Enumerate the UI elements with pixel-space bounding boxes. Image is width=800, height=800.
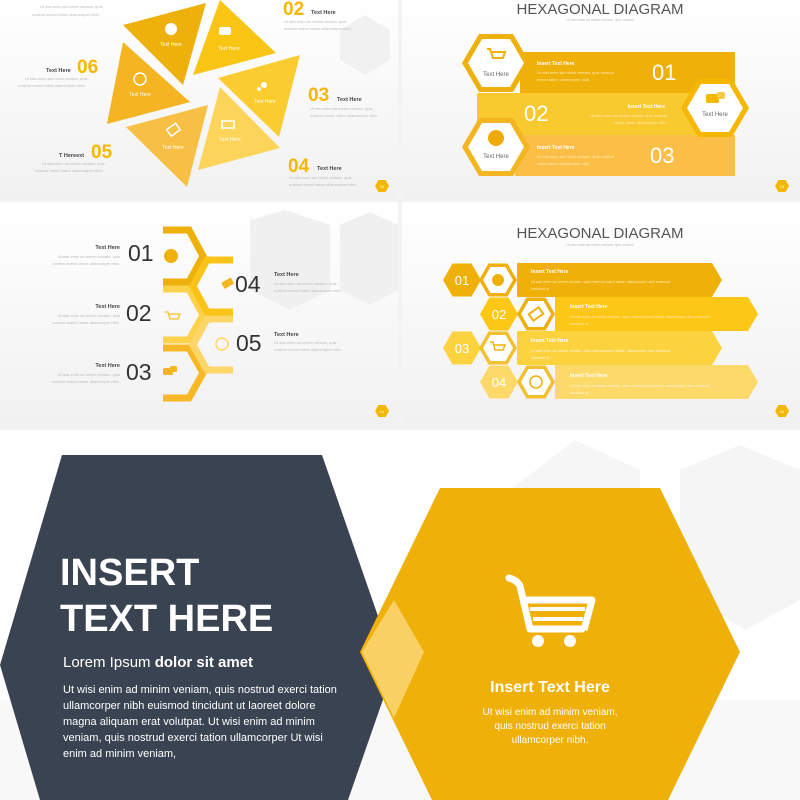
row 4: Ut wisi enim ad minim veniam, quis nostrud exerci tation ullamcorper nibh euismod [570, 384, 709, 388]
triangle 3 share [218, 55, 300, 137]
panel: slide 15 hexagonal diagram rows: Ut wisi enim ad minim veniam, quis nostrud [566, 243, 634, 247]
yellow hex body: Ut wisi enim ad minim veniam, [482, 707, 618, 718]
yellow hex body [482, 707, 618, 746]
items: 04 [235, 271, 261, 297]
panel: slide 12 triangles: Ut wisi enim ad minim veniam, quis [289, 175, 351, 180]
band 02: exerci tation ullamcorper nibh. [614, 120, 667, 125]
row 1: Insert Text Here [531, 269, 569, 275]
panel: slide 12 triangles: nostrud exerci tation ullamcorper nibh. [289, 182, 357, 187]
items: 01 [128, 240, 154, 266]
hex 3 pie [462, 118, 530, 176]
panel: slide 12 triangles: Ut wisi enim ad minim veniam, quis [42, 161, 104, 166]
labels: 06 [77, 57, 98, 78]
labels: Text Here [337, 97, 362, 103]
row 4: tincidunt ut [570, 391, 589, 395]
items: 02 [126, 300, 152, 326]
title: HEXAGONAL DIAGRAM [517, 1, 683, 18]
panel: slide 14 chevrons: Text Here [274, 272, 299, 278]
dark hex heading: TEXT HERE [60, 598, 273, 640]
row 2: tincidunt ut [570, 322, 589, 326]
triangle 3 share: Text Here [254, 99, 276, 105]
triangle 5 tag [126, 105, 208, 187]
panel: slide 14 chevrons: nostrud exerci tation ullamcorper nibh. [274, 347, 342, 352]
yellow hexagon [360, 488, 740, 800]
panel: slide 12 triangles: nostrud exerci tation ullamcorper nibh. [35, 168, 103, 173]
subheading: Lorem Ipsum dolor sit amet [63, 654, 253, 671]
panel: bottom hero slide [0, 430, 800, 800]
panel: slide 12 triangles: nostrud exerci tation ullamcorper nibh. [310, 113, 378, 118]
row 2 [480, 297, 758, 331]
band 02: Ut wisi enim ad minim veniam, quis nostrud [590, 113, 667, 118]
page badge 14: 14 [380, 409, 385, 414]
page badge 12 [375, 180, 389, 192]
page badge 13: 13 [780, 184, 785, 189]
panel: slide 14 chevrons [0, 202, 398, 426]
panel: slide 12 triangles: Ut wisi enim ad minim veniam, quis [40, 4, 102, 9]
panel: slide 14 chevrons: nostrud exerci tation ullamcorper nibh. [52, 379, 120, 384]
panel: slide 14 chevrons: Text Here [95, 363, 120, 369]
items [126, 240, 262, 385]
page badge 13 [775, 180, 789, 192]
hex 2 chat: Text Here [702, 112, 728, 118]
row 3: Ut wisi enim ad minim veniam, quis nostrud exerci tation ullamcorper nibh euismod [531, 349, 670, 353]
yellow hex title: Insert Text Here [490, 679, 610, 696]
labels: 04 [288, 156, 310, 177]
dark hex body: veniam, quis nostrud exerci tation ullamcorper Ut wisi [63, 732, 323, 744]
triangle 2 chat [193, 0, 276, 75]
dark hex body: ullamcorper nibh euismod tincidunt ut laoreet dolore [63, 700, 316, 712]
labels [46, 0, 362, 177]
row 2: Ut wisi enim ad minim veniam, quis nostrud exerci tation ullamcorper nibh euismod [570, 315, 709, 319]
dark hex heading [60, 552, 273, 640]
triangle 6 clock: Text Here [129, 92, 151, 98]
row 3: 03 [455, 341, 469, 356]
page badge 14 [375, 405, 389, 417]
page badge 15 [775, 405, 789, 417]
band 02: Insert Text Here [628, 104, 665, 110]
row 3 [443, 331, 722, 365]
triangle 2 chat: Text Here [218, 46, 240, 52]
band 03: Ut wisi enim ad minim veniam, quis nostrud [537, 154, 614, 159]
panel: slide 14 chevrons: Ut wisi enim ad minim veniam, quis [58, 254, 120, 259]
page badge 12: 12 [380, 184, 385, 189]
dark hex body: Ut wisi enim ad minim veniam, quis nostrud exerci tation [63, 684, 337, 696]
dark hexagon [0, 455, 395, 800]
row 4 [480, 365, 758, 399]
row 2: 02 [492, 307, 506, 322]
panel: slide 13 hexagonal diagram [402, 0, 800, 199]
band 01: 01 [652, 60, 676, 85]
band 02 [477, 93, 717, 135]
dark hex body: magna aliquam erat volutpat. Ut wisi enim ad minim [63, 716, 315, 728]
row 4: Insert Text Here [570, 373, 608, 379]
row 1 [443, 263, 722, 297]
panel: slide 14 chevrons: nostrud exerci tation ullamcorper nibh. [52, 320, 120, 325]
labels: Text Here [311, 10, 336, 16]
panel: slide 14 chevrons: Ut wisi enim ad minim veniam, quis [58, 372, 120, 377]
band 01: Ut wisi enim ad minim veniam, quis nostrud [537, 70, 614, 75]
items: 05 [236, 330, 262, 356]
panel: slide 12 triangles [0, 0, 398, 199]
band 03: 03 [650, 143, 674, 168]
row 4: 04 [492, 375, 506, 390]
panel: slide 14 chevrons: Text Here [274, 332, 299, 338]
page badge 15: 15 [780, 409, 785, 414]
hex 1 cart: Text Here [483, 72, 509, 78]
chevrons [163, 230, 233, 398]
triangle 1 pie: Text Here [160, 42, 182, 48]
triangle 1 pie [123, 3, 206, 85]
triangle 4 cart [198, 87, 280, 170]
panel: slide 14 chevrons: Text Here [95, 304, 120, 310]
row 1: Ut wisi enim ad minim veniam, quis nostrud exerci tation ullamcorper nibh euismod [531, 280, 670, 284]
panel: slide 14 chevrons: Ut wisi enim ad minim veniam, quis [274, 340, 336, 345]
dark hex body: enim ad minim veniam, [63, 748, 176, 760]
overlap [362, 600, 424, 718]
panel: slide 12 triangles: nostrud exerci tation ullamcorper nibh. [284, 26, 352, 31]
band 01 [520, 52, 735, 93]
icon: cart [509, 578, 592, 647]
panel: slide 14 chevrons: nostrud exerci tation ullamcorper nibh. [52, 261, 120, 266]
panel: slide 13 hexagonal diagram: Ut wisi enim ad minim veniam, quis nostrud [566, 18, 634, 22]
panel: slide 14 chevrons: Ut wisi enim ad minim veniam, quis [274, 281, 336, 286]
panel: slide 14 chevrons: Ut wisi enim ad minim veniam, quis [58, 313, 120, 318]
yellow hex body: ullamcorper nibh. [512, 735, 588, 746]
band 03: Insert Text Here [537, 145, 575, 151]
labels: Text Here [317, 166, 342, 172]
labels: Text Here [46, 68, 71, 74]
row 3: tincidunt ut [531, 356, 550, 360]
panel: slide 12 triangles: nostrud exerci tation ullamcorper nibh. [32, 12, 100, 17]
band 02: 02 [524, 101, 548, 126]
items: 03 [126, 359, 152, 385]
row 1: tincidunt ut [531, 287, 550, 291]
row 3: Insert Text Here [531, 338, 569, 344]
triangle 5 tag: Text Here [162, 145, 184, 151]
dark hex heading: INSERT [60, 552, 199, 594]
row 1: 01 [455, 273, 469, 288]
band 03: exerci tation ullamcorper nibh. [537, 161, 590, 166]
icons [163, 249, 234, 375]
panel: slide 14 chevrons: Text Here [95, 245, 120, 251]
title: HEXAGONAL DIAGRAM [517, 225, 683, 242]
band 01: exerci tation ullamcorper nibh. [537, 77, 590, 82]
labels: T Hereext [59, 153, 84, 159]
band 03 [515, 135, 735, 176]
panel: slide 12 triangles: Ut wisi enim ad minim veniam, quis [284, 19, 346, 24]
triangle 6 clock [107, 42, 190, 124]
hex 2 chat [681, 79, 749, 137]
hex 1 cart [462, 34, 530, 92]
panel: slide 14 chevrons: nostrud exerci tation ullamcorper nibh. [274, 288, 342, 293]
row 2: Insert Text Here [570, 304, 608, 310]
panel: slide 15 hexagonal diagram rows [402, 202, 800, 426]
dark hex body [63, 684, 337, 760]
yellow hex body: quis nostrud exerci tation [494, 721, 606, 732]
labels: 05 [91, 142, 113, 163]
hex 3 pie: Text Here [483, 154, 509, 160]
panel: slide 12 triangles: nostrud exerci tation ullamcorper nibh. [18, 83, 86, 88]
panel: slide 12 triangles: Ut wisi enim ad minim veniam, quis [25, 76, 87, 81]
triangle 4 cart: Text Here [219, 137, 241, 143]
panel: slide 12 triangles: Ut wisi enim ad minim veniam, quis [310, 106, 372, 111]
band 01: Insert Text Here [537, 61, 575, 67]
labels: 03 [308, 85, 329, 106]
